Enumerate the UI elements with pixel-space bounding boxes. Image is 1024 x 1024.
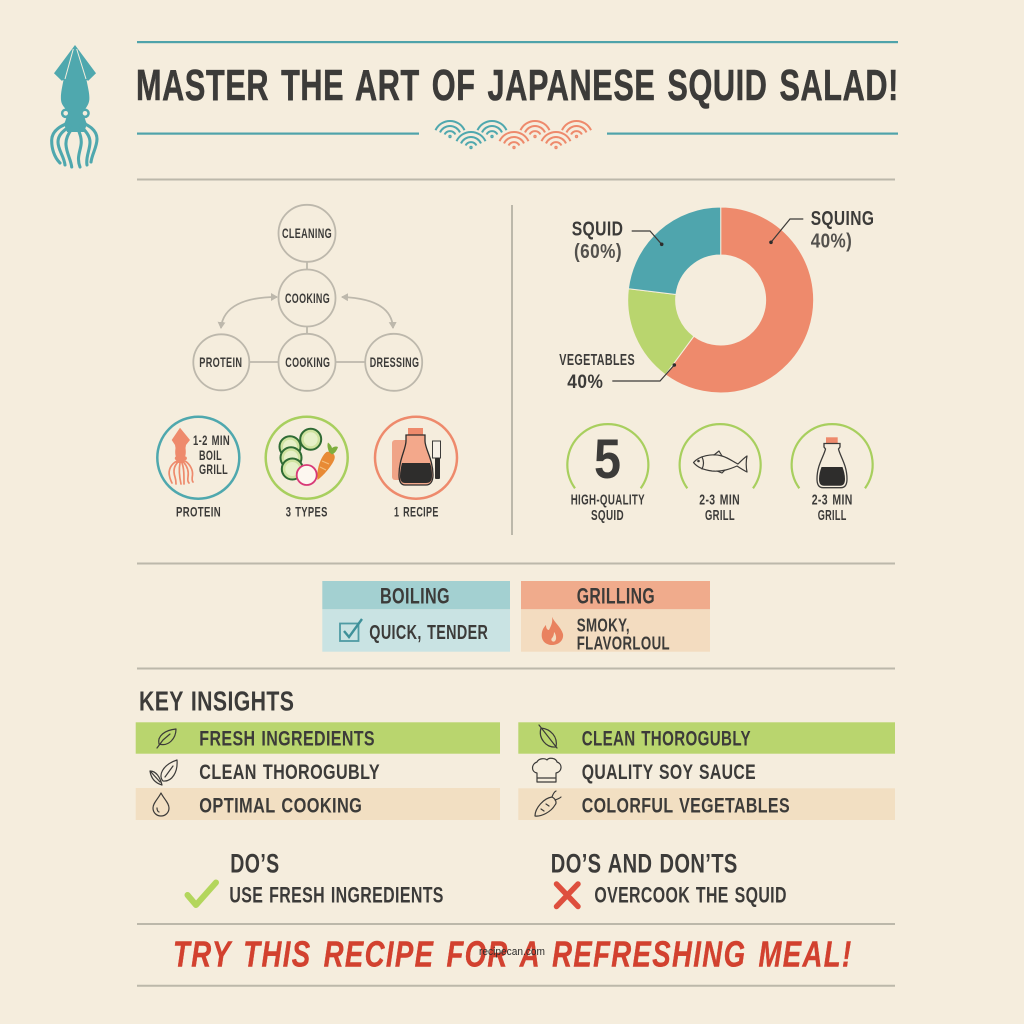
node: cooking top	[278, 270, 336, 326]
gauge: fish grill time: GRILL	[705, 508, 735, 524]
gauge: high-quality squid: 5	[594, 427, 621, 490]
stat: protein	[157, 417, 239, 520]
icon: sprout leaves	[150, 760, 177, 785]
icon: leaf	[157, 729, 176, 748]
donut label: squing: SQUING	[811, 208, 874, 230]
insights: left column: CLEAN THOROGUBLY	[199, 760, 380, 784]
insights: right column	[518, 722, 895, 820]
panel: boiling	[322, 581, 510, 652]
stat: protein: 1-2 MIN	[193, 432, 230, 448]
gauge: soy sauce grill time: GRILL	[818, 508, 847, 524]
insights: left column: FRESH INGREDIENTS	[199, 727, 375, 751]
do's: USE FRESH INGREDIENTS	[229, 883, 444, 908]
gauge: high-quality squid: HIGH-QUALITY	[571, 492, 645, 508]
insights: right column: QUALITY SOY SAUCE	[582, 760, 756, 784]
panel: boiling: BOILING	[380, 583, 450, 608]
donut label: squid: SQUID	[572, 219, 623, 241]
insights: right column: COLORFUL VEGETABLES	[582, 793, 790, 817]
gauge: soy sauce grill time: 2-3 MIN	[812, 492, 853, 508]
stat: one recipe	[375, 417, 457, 520]
donut label: squid: (60%)	[574, 241, 622, 263]
heading: key insights: KEY INSIGHTS	[139, 686, 294, 717]
gauge: high-quality squid: SQUID	[591, 508, 624, 524]
insights: right column: CLEAN THOROGUBLY	[582, 727, 751, 751]
node: cleaning	[278, 205, 336, 262]
stat: vegetable types: 3 TYPES	[286, 504, 328, 520]
icon: slanted leaf	[539, 725, 557, 748]
node: cooking top: COOKING	[285, 290, 330, 306]
stat: vegetable types	[266, 417, 348, 520]
stat: protein: GRILL	[199, 461, 228, 477]
node: protein	[193, 334, 249, 390]
watermark: recipecan.com	[479, 946, 545, 958]
icon: carrot	[535, 791, 561, 816]
icon: chef hat	[532, 758, 561, 782]
don'ts: OVERCOOK THE SQUID	[594, 883, 787, 908]
donut label: vegetables: VEGETABLES	[559, 352, 635, 369]
node: cooking bottom: COOKING	[285, 354, 330, 370]
panel: grilling	[521, 581, 710, 653]
panel: boiling: QUICK, TENDER	[369, 622, 488, 644]
don'ts: DO’S AND DON’TS	[551, 849, 738, 879]
flow diagram	[193, 205, 422, 391]
segment: teal	[628, 207, 721, 294]
gauge: high-quality squid	[567, 424, 648, 524]
donut chart	[628, 207, 814, 393]
segment: green	[628, 289, 694, 375]
don'ts	[551, 849, 787, 908]
donut label: squid	[572, 219, 664, 263]
stat: protein: BOIL	[199, 447, 222, 463]
do's	[188, 849, 444, 908]
gauge: soy sauce grill time	[792, 424, 873, 524]
node: dressing: DRESSING	[370, 354, 419, 370]
node: cooking bottom	[278, 334, 336, 391]
do's: DO’S	[230, 849, 280, 879]
gauge: fish grill time: 2-3 MIN	[699, 492, 740, 508]
icon: check mark	[188, 882, 216, 905]
icon: teal squid	[52, 45, 97, 167]
insights: left column	[136, 722, 500, 820]
panel: grilling: SMOKY,	[577, 616, 630, 636]
header top rule	[137, 41, 898, 43]
segment: coral	[665, 207, 814, 393]
node: protein: PROTEIN	[199, 354, 242, 370]
icon: water drop	[153, 793, 169, 816]
panel: grilling: GRILLING	[577, 583, 655, 608]
donut label: squing: 40%)	[811, 231, 852, 253]
icon: red cross	[556, 884, 578, 906]
donut label: squing	[769, 208, 874, 253]
insights: left column: OPTIMAL COOKING	[199, 793, 362, 817]
stat: protein: PROTEIN	[176, 504, 221, 520]
stat: one recipe: 1 RECIPE	[394, 504, 439, 520]
panel: grilling: FLAVORLOUL	[577, 633, 670, 653]
donut label: vegetables	[559, 352, 676, 393]
gauge: fish grill time	[680, 424, 761, 524]
node: dressing	[365, 334, 422, 391]
header divider with wave ornament	[137, 121, 898, 148]
donut label: vegetables: 40%	[567, 372, 603, 393]
node: cleaning: CLEANING	[282, 225, 332, 241]
